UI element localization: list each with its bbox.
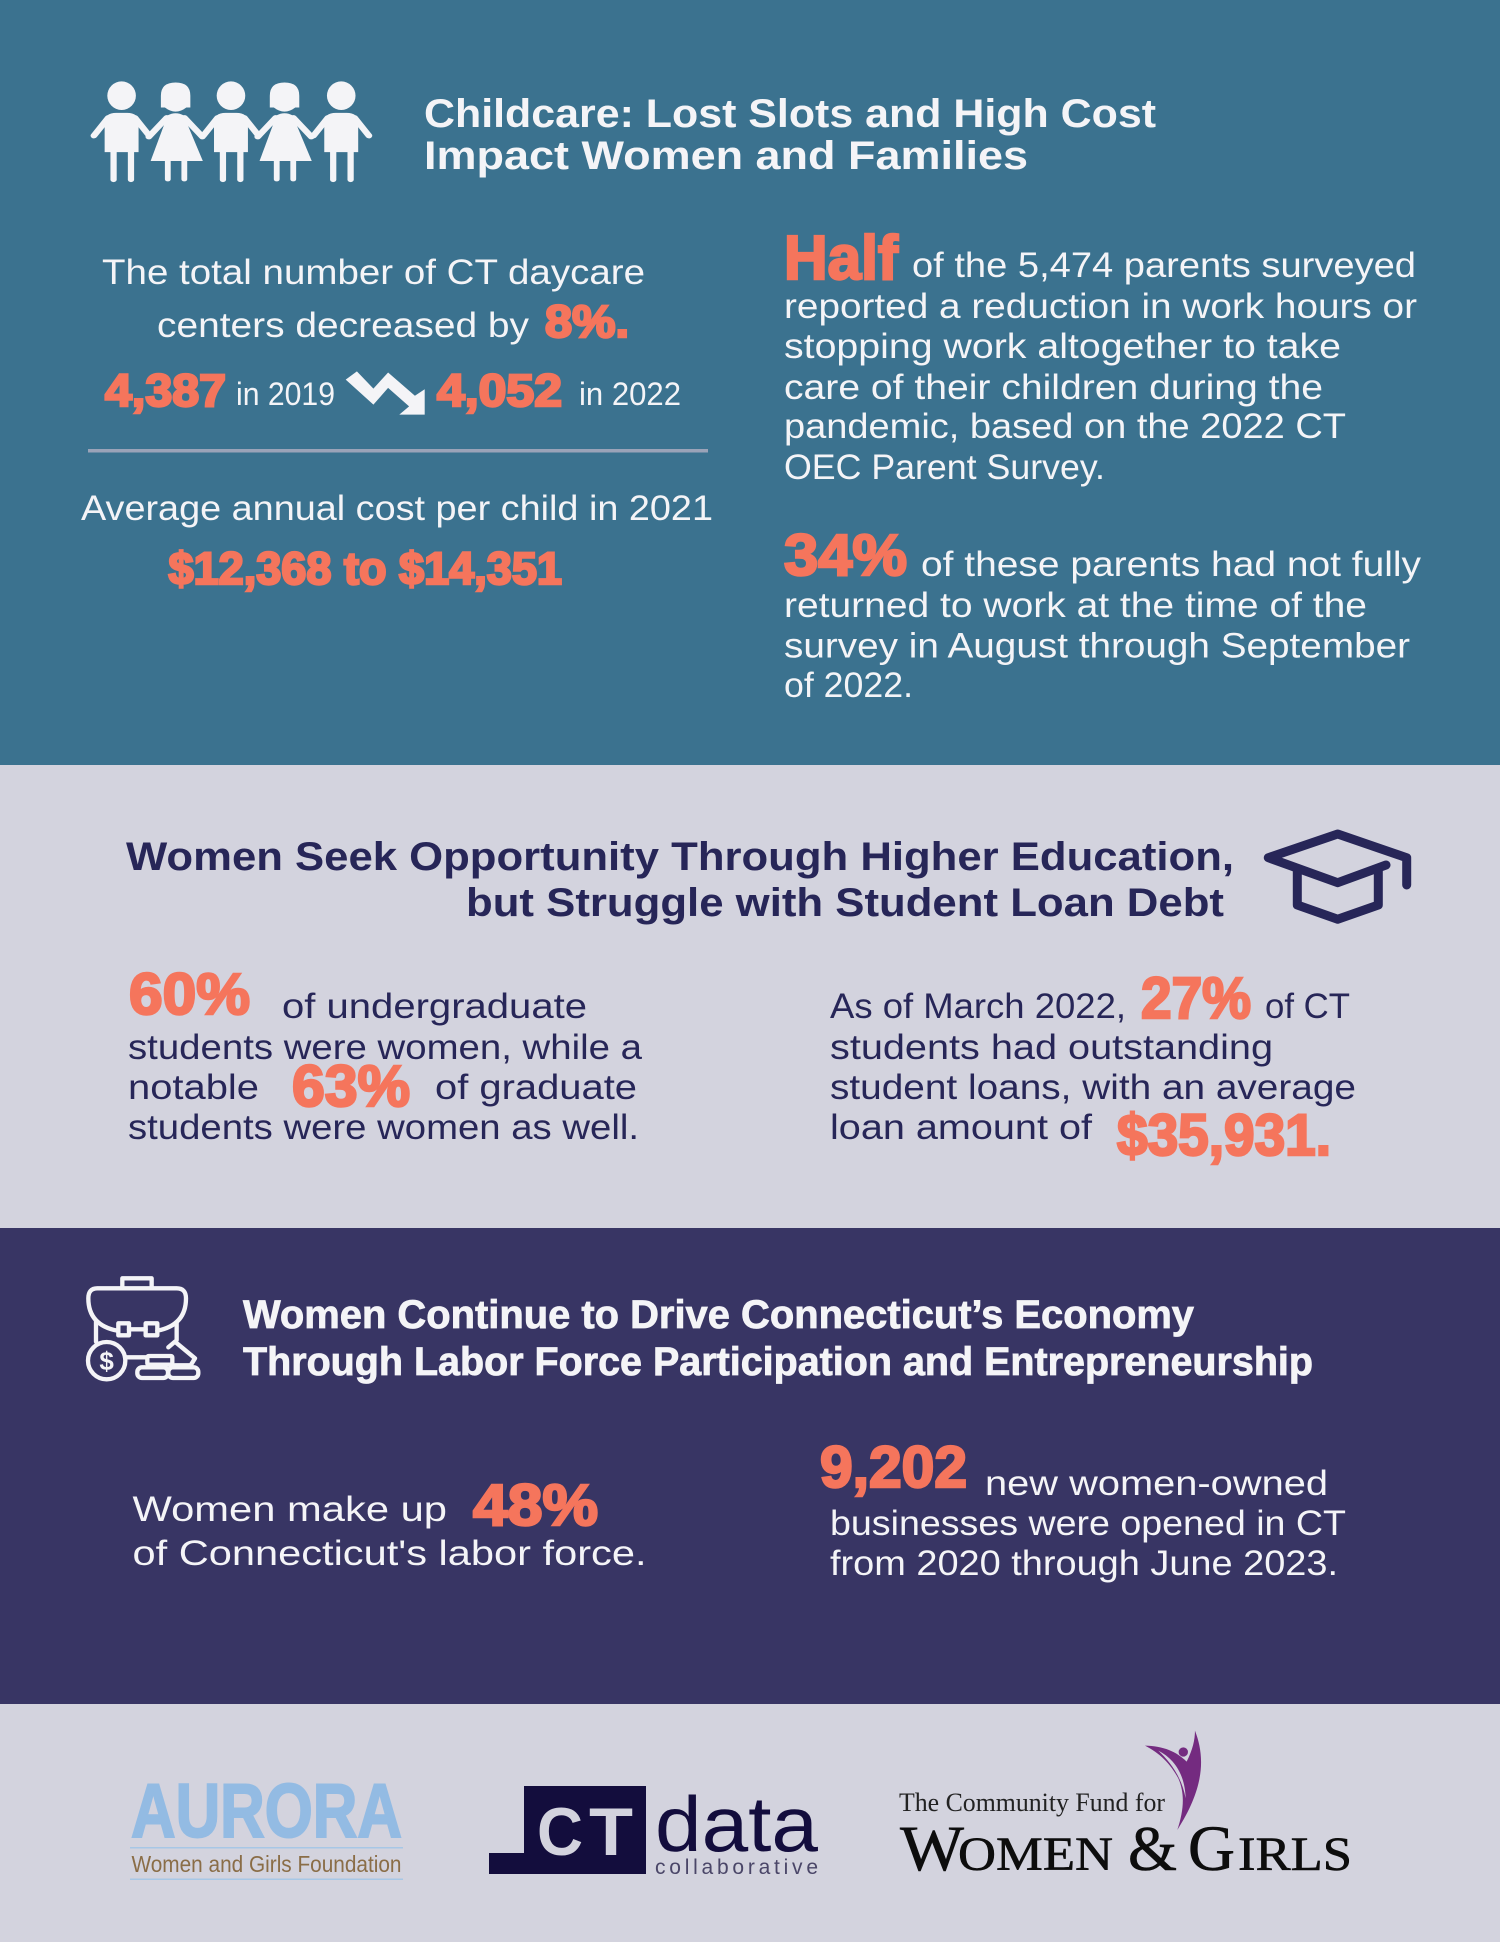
text block: 60% undergraduates and 63% graduates: 60% xyxy=(129,962,250,1027)
logo: Aurora Women and Girls Foundation: AURORA xyxy=(131,1769,402,1854)
logo: The Community Fund for Women and Girls: IRLS xyxy=(1238,1828,1352,1881)
stat: 4,387 in 2019: in 2019 xyxy=(236,376,335,412)
text block: average annual cost xyxy=(81,489,713,594)
logo: The Community Fund for Women and Girls xyxy=(899,1731,1352,1885)
text block: daycare centers decreased by 8%: 8%. xyxy=(545,296,629,347)
text block: average annual cost: $12,368 to $14,351 xyxy=(168,543,562,594)
text block: 9,202 new businesses xyxy=(820,1435,1346,1583)
text block: half of parents surveyed: stopping work altogether to take xyxy=(784,327,1341,366)
text block: 9,202 new businesses: from 2020 through June 2023. xyxy=(830,1544,1338,1583)
icon: zigzag down arrow xyxy=(346,371,425,415)
text block: 60% undergraduates and 63% graduates: 63% xyxy=(292,1054,410,1119)
panel: higher education xyxy=(0,765,1500,1228)
logo: CT data collaborative: C xyxy=(537,1794,583,1870)
heading: higher education xyxy=(126,835,1234,925)
text block: 27% with student loans: $35,931. xyxy=(1117,1103,1331,1168)
stat: 4,052 in 2022: in 2022 xyxy=(579,376,681,412)
text block: 34% of parents not returned: of these parents had not fully xyxy=(921,545,1422,584)
text block: 60% undergraduates and 63% graduates: students were women, while a xyxy=(128,1028,643,1067)
logo: CT data collaborative: T xyxy=(589,1794,633,1870)
icon: row of children holding hands xyxy=(94,81,369,182)
heading: childcare xyxy=(424,92,1156,178)
logo: Aurora Women and Girls Foundation xyxy=(130,1769,403,1880)
text block: 60% undergraduates and 63% graduates: students were women as well. xyxy=(128,1108,639,1147)
text block: 34% of parents not returned: of 2022. xyxy=(784,666,913,705)
icon: briefcase with coins: $ xyxy=(99,1346,114,1376)
text block: 60% undergraduates and 63% graduates: of graduate xyxy=(435,1068,637,1107)
logo: The Community Fund for Women and Girls: G xyxy=(1188,1813,1235,1885)
text block: daycare centers decreased by 8% xyxy=(102,253,645,347)
heading: higher education: but Struggle with Student Loan Debt xyxy=(466,881,1224,925)
text block: 60% undergraduates and 63% graduates: of undergraduate xyxy=(282,987,587,1026)
text block: half of parents surveyed: Half xyxy=(784,224,898,293)
panel: economy xyxy=(0,1228,1500,1704)
logo: The Community Fund for Women and Girls: & xyxy=(1128,1813,1177,1884)
logo: The Community Fund for Women and Girls: The Community Fund for xyxy=(899,1788,1165,1817)
logo: CT data collaborative: collaborative xyxy=(655,1856,818,1879)
text block: half of parents surveyed: reported a reduction in work hours or xyxy=(784,287,1417,326)
text block: half of parents surveyed: of the 5,474 parents surveyed xyxy=(912,246,1416,285)
heading: economy: Women Continue to Drive Connecticut’s Economy xyxy=(243,1293,1195,1337)
text block: 34% of parents not returned xyxy=(784,523,1422,705)
text block: 9,202 new businesses: 9,202 xyxy=(820,1435,967,1500)
heading: higher education: Women Seek Opportunity Through Higher Education, xyxy=(126,835,1234,879)
logo: The Community Fund for Women and Girls: W xyxy=(900,1813,965,1885)
text block: average annual cost: Average annual cost per child in 2021 xyxy=(81,489,713,528)
stat: 4,052 in 2022: 4,052 xyxy=(437,365,562,416)
icon: graduation cap xyxy=(1268,834,1407,919)
text block: half of parents surveyed: OEC Parent Survey. xyxy=(784,448,1105,487)
text block: 34% of parents not returned: 34% xyxy=(784,523,907,588)
logo: CT data collaborative: data xyxy=(655,1780,819,1868)
text block: 9,202 new businesses: new women-owned xyxy=(985,1464,1328,1503)
text block: 48% of labor force xyxy=(132,1473,646,1573)
text block: 9,202 new businesses: businesses were opened in CT xyxy=(830,1504,1346,1543)
text block: 27% with student loans: of CT xyxy=(1265,987,1350,1026)
heading: economy: Through Labor Force Participation and Entrepreneurship xyxy=(243,1340,1313,1384)
panel: partner logos xyxy=(0,1704,1500,1942)
text block: 27% with student loans: As of March 2022, xyxy=(830,987,1126,1026)
logo: CT data collaborative xyxy=(489,1780,819,1879)
text block: 34% of parents not returned: survey in August through September xyxy=(784,626,1410,666)
text block: 48% of labor force: 48% xyxy=(473,1473,598,1538)
heading: economy xyxy=(243,1293,1313,1384)
heading: childcare: Impact Women and Families xyxy=(424,134,1028,178)
logo: The Community Fund for Women and Girls: OMEN xyxy=(958,1828,1113,1881)
text block: daycare centers decreased by 8%: The total number of CT daycare xyxy=(102,253,645,292)
stat: 4,052 in 2022 xyxy=(437,365,681,416)
logo: Aurora Women and Girls Foundation: Women and Girls Foundation xyxy=(132,1851,402,1877)
icon: briefcase with coins xyxy=(88,1278,198,1379)
stat: 4,387 in 2019 xyxy=(105,365,335,416)
text block: half of parents surveyed: care of their children during the xyxy=(784,368,1323,407)
text block: 27% with student loans: 27% xyxy=(1141,966,1251,1031)
text block: daycare centers decreased by 8%: centers decreased by xyxy=(157,306,530,345)
heading: childcare: Childcare: Lost Slots and High Cost xyxy=(424,92,1156,136)
text block: 34% of parents not returned: returned to work at the time of the xyxy=(784,586,1367,625)
icon: purple raised-arm figure xyxy=(1145,1731,1201,1830)
text block: half of parents surveyed xyxy=(784,224,1417,487)
text block: 60% undergraduates and 63% graduates: notable xyxy=(128,1068,259,1107)
text block: 27% with student loans: loan amount of xyxy=(830,1108,1092,1147)
stat: 4,387 in 2019: 4,387 xyxy=(105,365,226,416)
text block: 27% with student loans: students had outstanding xyxy=(830,1028,1273,1067)
text block: 27% with student loans: student loans, with an average xyxy=(830,1068,1356,1107)
text block: 48% of labor force: of Connecticut's labor force. xyxy=(132,1534,646,1573)
panel: childcare xyxy=(0,0,1500,765)
text block: 60% undergraduates and 63% graduates xyxy=(128,962,643,1147)
text block: 27% with student loans xyxy=(830,966,1356,1168)
text block: 48% of labor force: Women make up xyxy=(132,1490,447,1529)
text block: half of parents surveyed: pandemic, based on the 2022 CT xyxy=(784,407,1346,446)
